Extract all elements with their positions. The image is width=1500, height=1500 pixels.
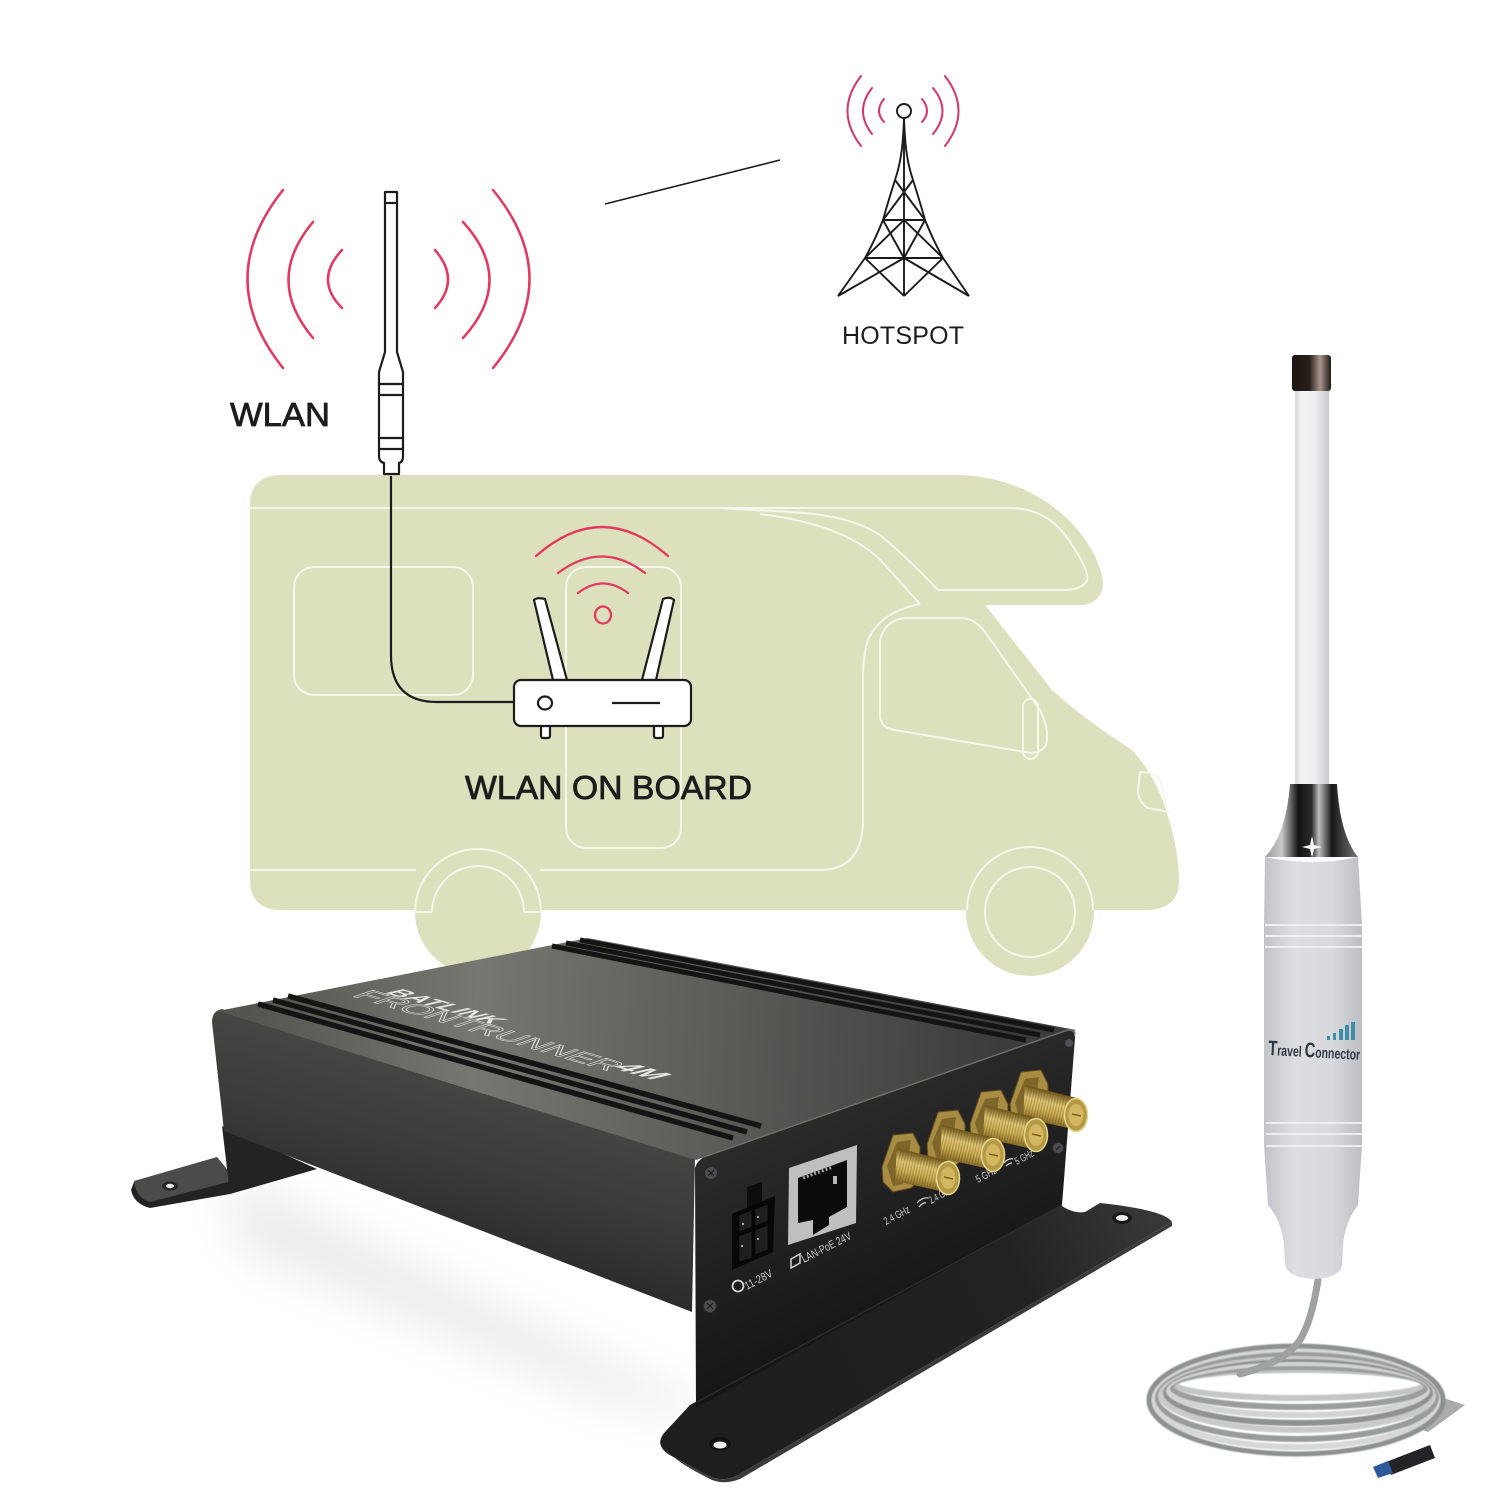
label: hotspot: HOTSPOT xyxy=(842,322,964,350)
panel crease xyxy=(697,1205,1062,1402)
port labels: 2.4 GHz xyxy=(882,1204,912,1228)
front wheel xyxy=(966,848,1094,976)
port labels: 11-28V xyxy=(743,1268,775,1293)
power connector xyxy=(732,1182,775,1270)
antenna whip xyxy=(1295,388,1329,786)
van white outline details xyxy=(250,508,1168,957)
antenna body xyxy=(1264,857,1362,1279)
router signal xyxy=(536,527,668,624)
port labels xyxy=(732,1148,1036,1293)
icon: hotspot tower xyxy=(838,76,969,296)
panel: camper van silhouette xyxy=(250,475,1179,976)
van body xyxy=(250,475,1179,910)
icon: WLAN signal arcs xyxy=(248,190,530,368)
right mounting flange xyxy=(660,1203,1172,1482)
antenna body ribs xyxy=(1265,925,1362,1146)
antenna cable coil xyxy=(1149,1280,1443,1454)
product: Travel Connector antenna xyxy=(1149,355,1465,1478)
left mounting foot xyxy=(131,1126,317,1208)
ground shadow xyxy=(225,1170,780,1430)
icon: WLAN on board router xyxy=(514,527,691,738)
USB strain relief xyxy=(1410,1392,1465,1432)
box brand text: 4M xyxy=(605,1060,678,1082)
port labels: 2.4 GHz xyxy=(927,1184,954,1207)
Travel Connector logo: Travel Connector xyxy=(1268,1037,1361,1065)
connector line to hotspot xyxy=(605,160,780,204)
USB plug xyxy=(1373,1445,1435,1478)
chrome collar xyxy=(1265,784,1358,857)
label: WLAN: WLAN xyxy=(230,396,330,433)
antenna black tip xyxy=(1292,355,1331,391)
port labels: 5 GHz xyxy=(974,1165,999,1186)
rear wheel xyxy=(415,849,541,975)
box brand text: FRONTRUNNER xyxy=(345,988,633,1073)
SMA antenna connectors xyxy=(882,1070,1088,1194)
box top face xyxy=(218,938,1076,1160)
tower lattice xyxy=(838,104,969,296)
box heat-sink grooves xyxy=(258,940,1054,1138)
box front panel xyxy=(695,1030,1075,1408)
Travel Connector logo xyxy=(1268,1022,1361,1065)
LAN port xyxy=(788,1145,857,1245)
tower signal arcs xyxy=(848,76,958,146)
box brand text: BATLINK xyxy=(380,986,513,1027)
collar sparkle xyxy=(1302,836,1322,858)
front panel screws xyxy=(704,1038,1074,1312)
port labels: LAN-PoE 24V xyxy=(800,1230,854,1266)
label: WLAN on board: WLAN ON BOARD xyxy=(465,769,752,806)
product: Batlink Frontrunner 4M router box xyxy=(131,938,1172,1482)
port labels: 5 GHz xyxy=(1013,1148,1036,1168)
icon: roof antenna with cable xyxy=(379,192,516,702)
box left side face xyxy=(212,1009,695,1312)
router antennas and case xyxy=(514,598,691,738)
